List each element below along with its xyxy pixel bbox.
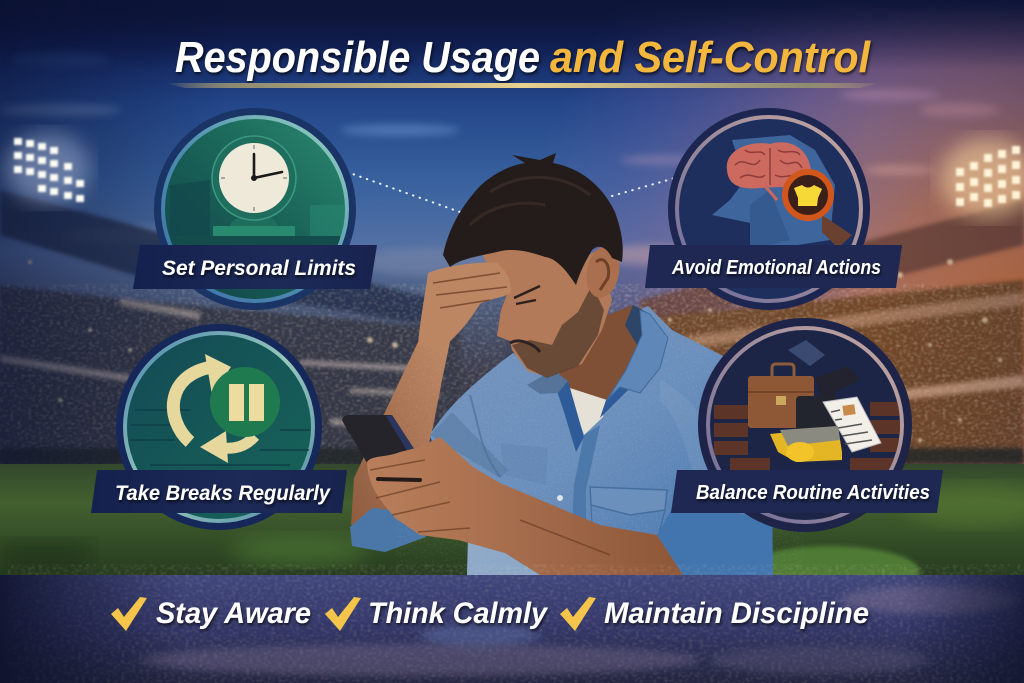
badge: Take Breaks Regularly — [91, 324, 347, 530]
phone — [342, 415, 420, 463]
banner: Balance Routine Activities — [696, 482, 930, 504]
title underline — [165, 83, 880, 88]
undershirt — [570, 388, 607, 435]
forearm and hands — [367, 437, 683, 575]
rolled sleeve right — [657, 495, 773, 575]
dotted connector: emotions to man — [612, 178, 675, 196]
banner: Avoid Emotional Actions — [671, 257, 881, 279]
icon: cycle arrows with pause — [130, 354, 310, 465]
banner — [91, 470, 347, 513]
ear — [583, 244, 623, 300]
title: and Self-Control — [550, 33, 871, 82]
dotted connector: limits to man — [347, 172, 460, 212]
placket — [570, 425, 600, 575]
banner: Set Personal Limits — [162, 257, 356, 280]
banner — [133, 245, 377, 289]
icon: briefcase, tablet, newspaper, calculator — [714, 340, 900, 470]
neck — [558, 305, 652, 400]
badge: Set Personal Limits — [133, 108, 377, 310]
open collar — [527, 305, 668, 452]
floodlights — [6, 132, 1024, 218]
banner — [671, 470, 943, 513]
title — [165, 33, 880, 88]
pitch — [0, 464, 1024, 598]
banner: Take Breaks Regularly — [115, 482, 331, 505]
hair — [443, 153, 623, 285]
bottom band with key reminders — [0, 575, 1024, 683]
reminder: Maintain Discipline: Maintain Discipline — [604, 597, 869, 630]
face — [478, 240, 612, 377]
reminder: Think Calmly: Think Calmly — [368, 597, 548, 630]
shirt cuff left — [350, 508, 426, 552]
badge: Avoid Emotional Actions — [645, 108, 902, 310]
pocket — [590, 487, 667, 515]
banner — [645, 245, 902, 288]
icon: brain, cloth and magnifier — [712, 135, 852, 252]
raised forearm — [351, 332, 452, 525]
central figure: stressed man with phone — [342, 153, 773, 575]
badge: Balance Routine Activities — [671, 318, 943, 532]
icon: desk clock — [170, 136, 345, 252]
title: Responsible Usage — [175, 33, 540, 82]
shirt — [430, 306, 773, 575]
hand on forehead — [418, 263, 511, 348]
reminder: Stay Aware: Stay Aware — [156, 597, 311, 630]
